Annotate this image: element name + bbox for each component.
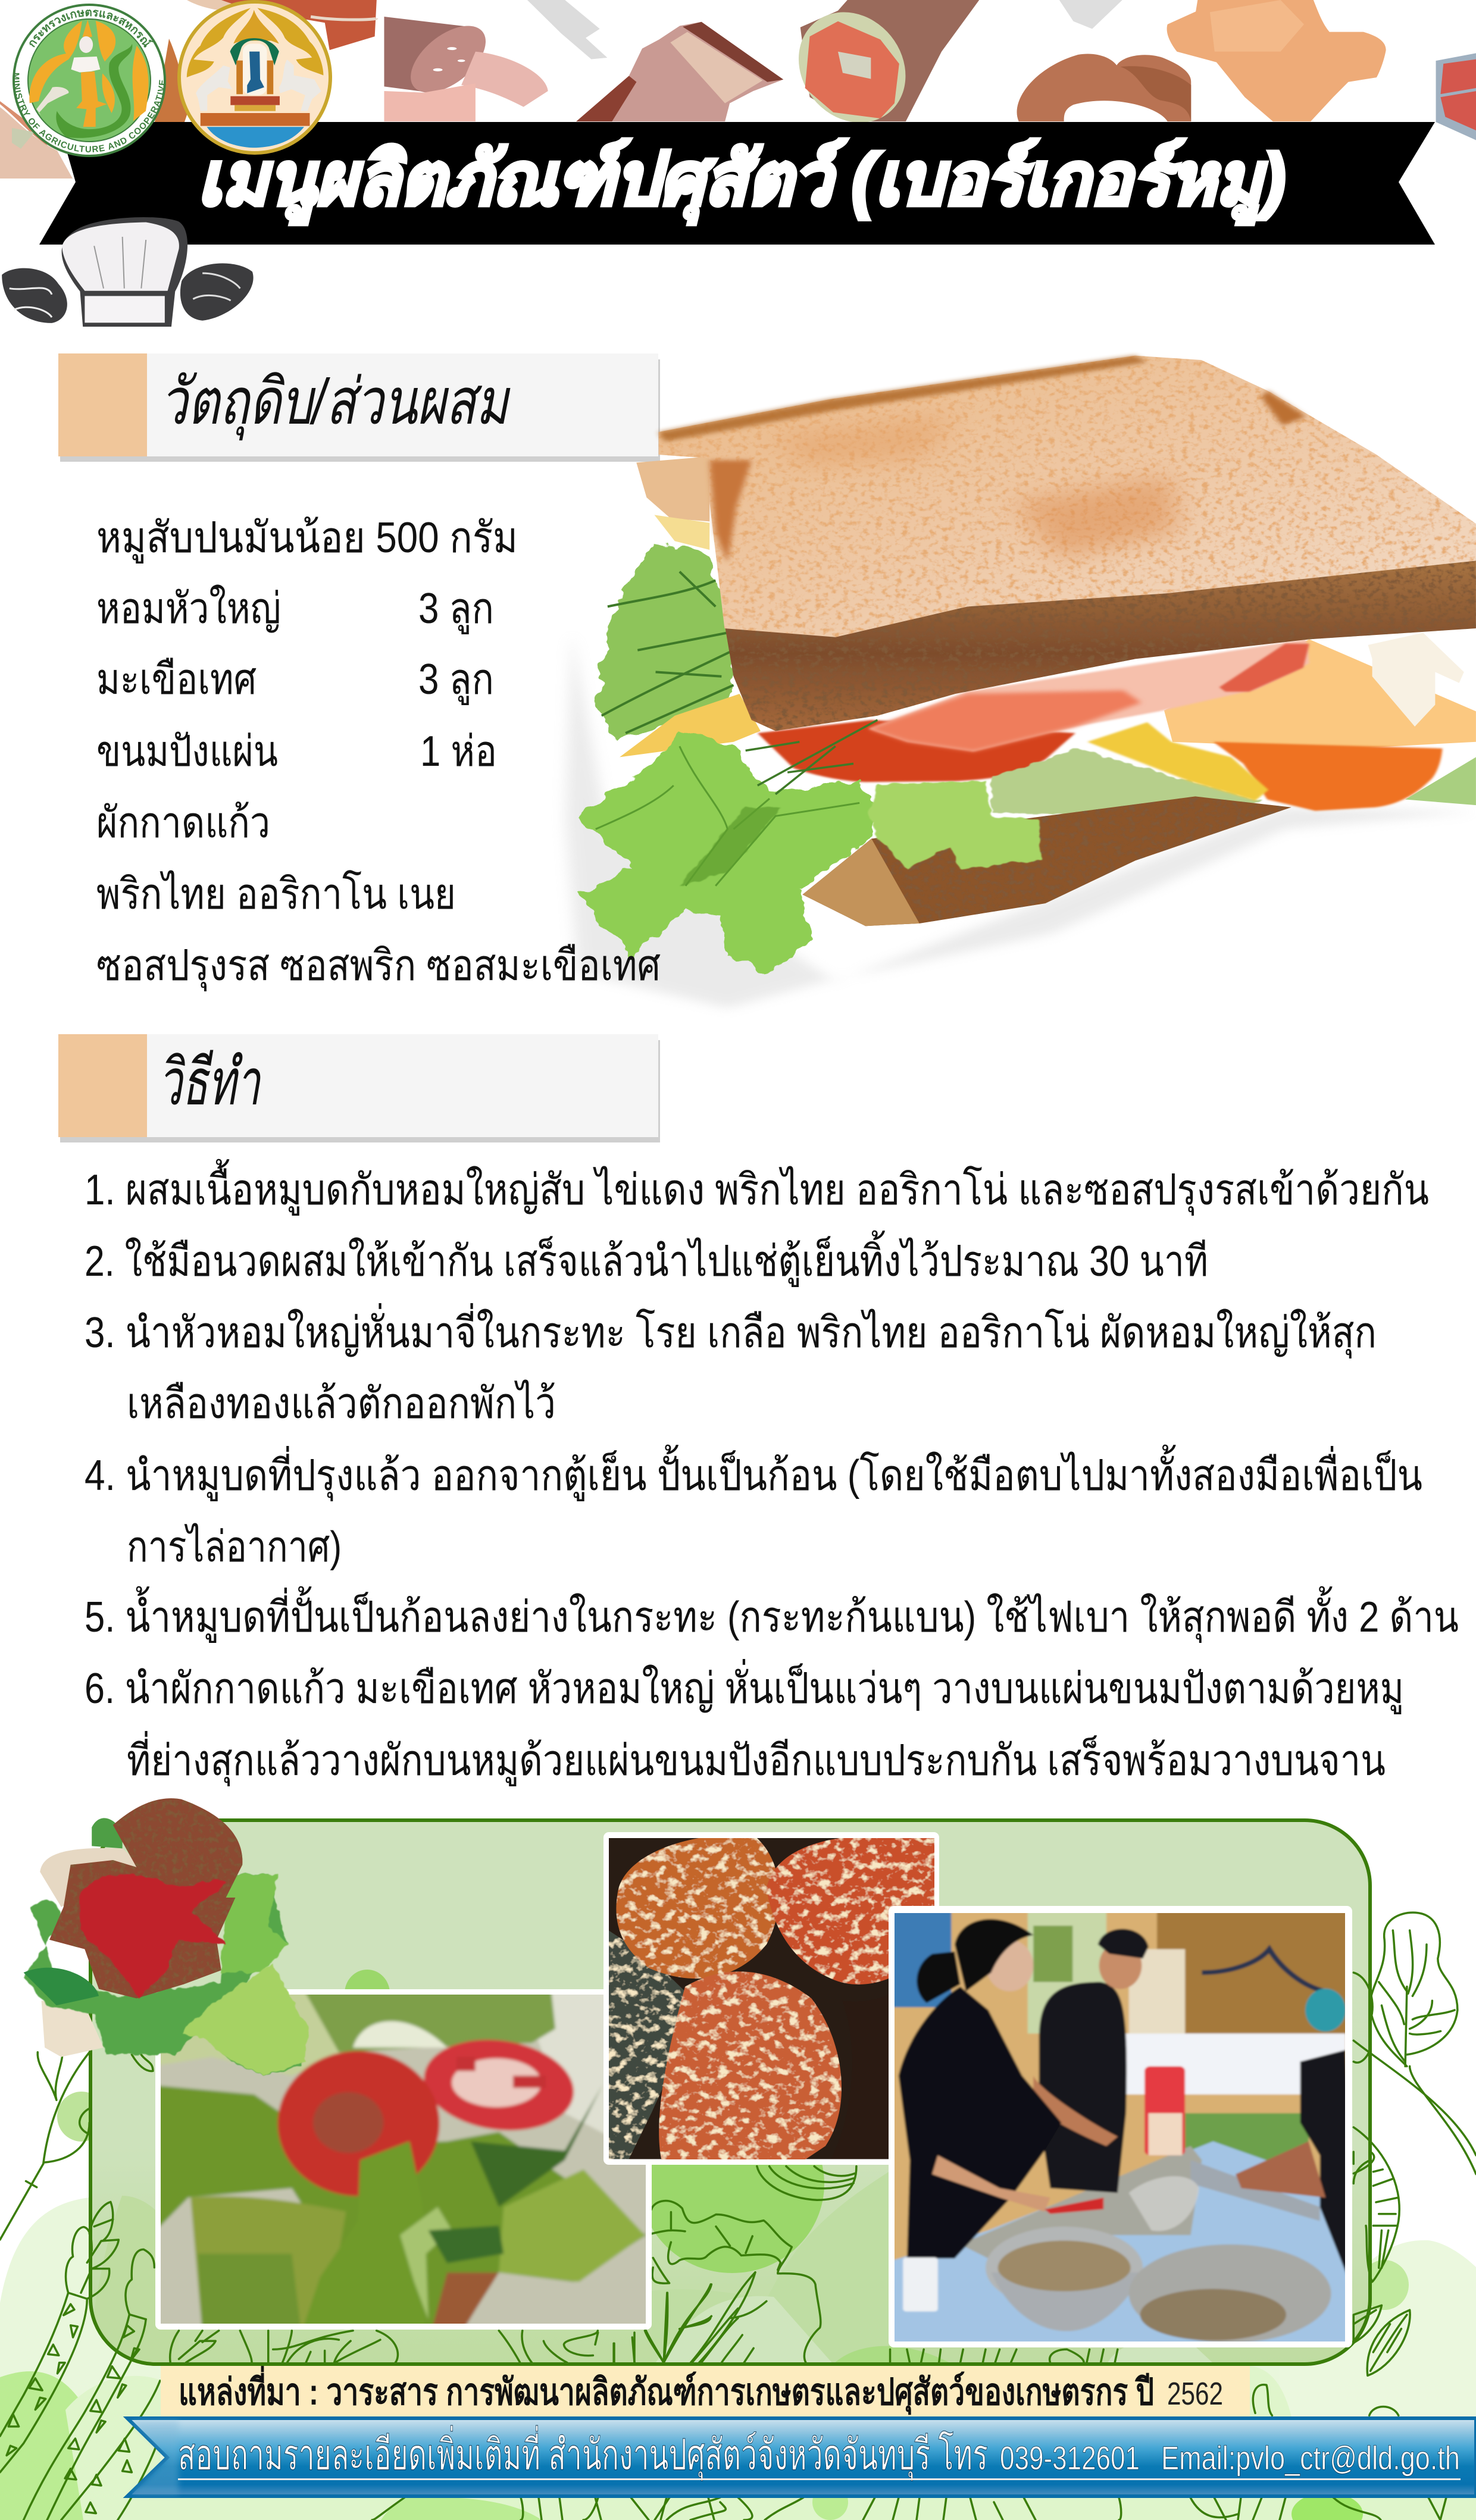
photo: burger cutout bbox=[24, 1798, 308, 2076]
meat: sausages bbox=[1017, 54, 1191, 121]
meat right bbox=[180, 264, 254, 321]
method steps: การไล่อากาศ) bbox=[127, 1523, 342, 1571]
source credit bar bbox=[161, 2366, 1250, 2417]
panel outline bbox=[90, 1820, 1370, 2364]
source credit bar: 2562 bbox=[1167, 2376, 1223, 2412]
onion bbox=[1368, 633, 1464, 727]
method steps bbox=[85, 1159, 1459, 1786]
method steps: เหลืองทองแล้วตักออกพักไว้ bbox=[127, 1379, 556, 1428]
meat: ham bbox=[576, 22, 783, 121]
ingredients list: ขนมปังแผ่น bbox=[96, 728, 278, 775]
background: asparagus line art, lower left bbox=[0, 2202, 160, 2520]
lettuce right bbox=[1405, 757, 1476, 805]
shadow bbox=[565, 633, 1476, 1008]
ingredients list: 3 ลูก bbox=[418, 585, 494, 634]
icon: chef hat with meat bbox=[2, 217, 254, 327]
lettuce mid bbox=[992, 749, 1261, 824]
contact ribbon: สอบถามรายละเอียดเพิ่มเติมที่ สำนักงานปศุสัตว์จังหวัดจันทบุรี โทร bbox=[178, 2425, 988, 2481]
photo: salad bbox=[152, 1985, 656, 2333]
header: meat illustration strip bbox=[0, 0, 1476, 179]
cheese mid bbox=[1087, 722, 1268, 801]
title: เมนูผลิตภัณฑ์ปศุสัตว์ (เบอร์เกอร์หมู) bbox=[198, 139, 1286, 224]
tomato right bbox=[1214, 742, 1442, 811]
ingredients list: พริกไทย ออริกาโน เนย bbox=[96, 869, 456, 918]
section heading: method: วิธีทำ bbox=[158, 1046, 261, 1118]
meat: salami bbox=[384, 17, 482, 92]
source credit bar: แหล่งที่มา : วาระสาร การพัฒนาผลิตภัณฑ์การเกษตรและปศุสัตว์ของเกษตรกร ปี bbox=[179, 2366, 1154, 2415]
section heading: ingredients: วัตถุดิบ/ส่วนผสม bbox=[160, 365, 511, 441]
contact ribbon: 039-312601 bbox=[1000, 2439, 1140, 2477]
ham bbox=[868, 639, 1309, 752]
cheese right bbox=[1164, 639, 1476, 749]
logo: Ministry of Agriculture and Cooperatives: กระทรวงเกษตรและสหกรณ์ bbox=[30, 10, 154, 48]
contact ribbon bbox=[127, 2418, 1476, 2496]
ingredients list: 3 ลูก bbox=[418, 656, 494, 705]
meat: steak joint bbox=[800, 0, 979, 121]
meat left bbox=[2, 268, 67, 323]
hat bbox=[62, 217, 187, 327]
photo: people preparing food bbox=[884, 1904, 1357, 2351]
top crust bbox=[724, 559, 1476, 731]
bottom bread bbox=[802, 796, 1292, 926]
big lettuce bbox=[577, 733, 876, 972]
ingredients list: หอมหัวใหญ่ bbox=[96, 584, 281, 633]
toasted edges bbox=[659, 356, 1147, 442]
section heading: method bbox=[58, 1034, 660, 1142]
meat: right steak bbox=[1436, 53, 1476, 140]
ingredients list: หมูสับปนมันน้อย 500 กรัม bbox=[96, 514, 518, 564]
ingredients list: มะเขือเทศ bbox=[96, 656, 257, 703]
small lettuce bbox=[868, 781, 1040, 869]
background: pale green blobs bbox=[0, 2092, 1476, 2520]
section heading: ingredients bbox=[58, 353, 660, 462]
meat: left cut under logos bbox=[0, 107, 73, 179]
background: plants below ribbon bbox=[372, 2497, 1446, 2520]
meat: chicken bbox=[1167, 0, 1386, 121]
title ribbon bbox=[39, 122, 1435, 245]
ingredients list bbox=[96, 514, 661, 991]
bread back bbox=[636, 456, 709, 521]
logo: Department of Livestock Development bbox=[179, 2, 330, 153]
background: lettuce line art inside panel bbox=[595, 2152, 1374, 2363]
method steps: 2. ใช้มือนวดผสมให้เข้ากัน เสร็จแล้วนำไปแช่ตู้เย็นทิ้งไว้ประมาณ 30 นาที bbox=[85, 1230, 1208, 1287]
ingredients list: 1 ห่อ bbox=[420, 728, 497, 775]
ingredients list: ผักกาดแก้ว bbox=[96, 799, 270, 847]
dill bbox=[746, 720, 877, 794]
top face bbox=[659, 356, 1476, 637]
background: right side plants bbox=[1253, 1912, 1476, 2415]
ingredients list: ซอสปรุงรส ซอสพริก ซอสมะเขือเทศ bbox=[96, 942, 661, 991]
sandwich photo bbox=[565, 356, 1476, 1008]
background: plant stems upper left bbox=[0, 2052, 153, 2240]
tomato bbox=[758, 720, 1075, 782]
background: left lettuce stalks under salad photo bbox=[170, 2284, 738, 2363]
lettuce left bbox=[596, 543, 734, 742]
photo: grilled patties bbox=[603, 1832, 943, 2165]
panel: photo gallery background bbox=[90, 1820, 1370, 2364]
